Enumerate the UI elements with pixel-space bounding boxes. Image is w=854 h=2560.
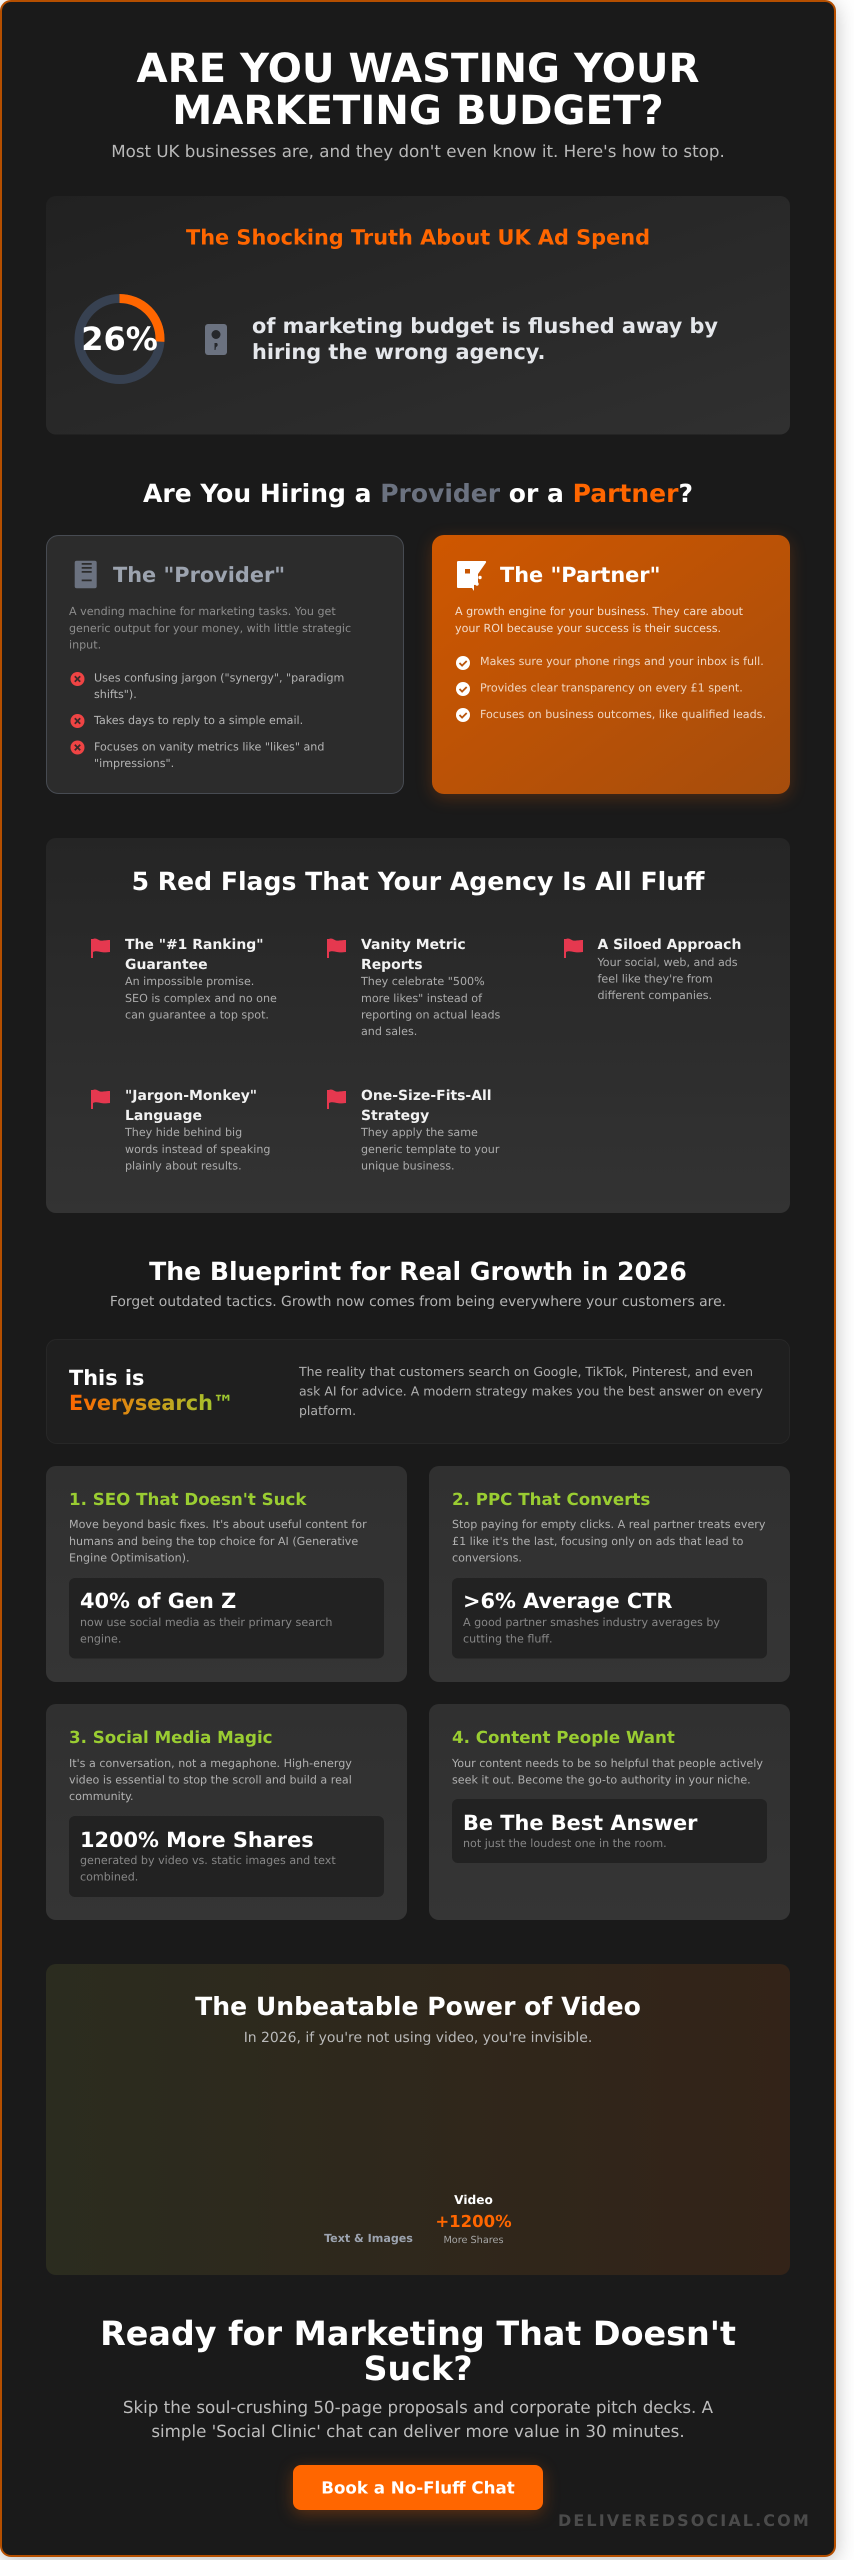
section heading: blueprint: The Blueprint for Real Growth in 2026 [149,1257,687,1286]
red flag 2: Vanity Metric [361,937,466,953]
panel subtitle: In 2026, if you're not using video, you're invisible. [244,2030,592,2046]
bar chart labels: More Shares [443,2235,504,2246]
red flag 3: different companies. [598,989,712,1002]
provider list: shifts"). [94,688,137,701]
stat box: Be The Best Answer [463,1811,698,1835]
everysearch heading: This is [69,1366,144,1390]
partner title: The "Partner" [500,563,660,587]
icon: check [456,682,470,696]
everysearch description: platform. [299,1403,356,1418]
CTA button: Book a No-Fluff Chat [321,2478,515,2498]
section heading: blueprint [110,1257,726,1310]
stat box: A good partner smashes industry averages by [463,1616,720,1629]
stat box [69,1816,384,1897]
red flag 1: SEO is complex and no one [125,992,277,1005]
stat box: generated by video vs. static images and text [80,1854,336,1867]
card: PPC: £1 like it's the last, focusing only on ads that lead to [452,1535,744,1548]
red flag 3 [564,937,741,1002]
red flag 5: Strategy [361,1108,429,1124]
stat box: engine. [80,1632,121,1646]
card: social media: community. [69,1790,134,1803]
stat box: 40% of Gen Z [80,1589,236,1613]
card: SEO: Engine Optimisation). [69,1552,190,1564]
card: content [429,1704,790,1920]
panel: red flags [46,838,790,1213]
red flag 5: generic template to your [361,1143,500,1156]
CTA heading: Ready for Marketing That Doesn't [100,2314,736,2353]
red flag 1: can guarantee a top spot. [125,1008,269,1022]
red flag 5: One-Size-Fits-All [361,1088,492,1104]
card: PPC: 2. PPC That Converts [452,1490,650,1509]
partner description: your ROI because your success is their success. [455,622,721,635]
stat box [452,1578,767,1658]
provider title: The "Provider" [113,563,285,587]
red flag 5: They apply the same [361,1126,478,1139]
card: SEO: Move beyond basic fixes. It's about useful content for [69,1518,367,1531]
stat box: combined. [80,1870,138,1884]
red flag 3: A Siloed Approach [598,937,741,953]
partner list: Provides clear transparency on every £1 spent. [480,682,743,694]
header [111,46,725,161]
red flag 5 [327,1088,500,1172]
stat box: 1200% More Shares [80,1828,314,1852]
bar chart labels: Text & Images [324,2232,413,2245]
panel: provider [46,536,404,794]
provider list: Uses confusing jargon ("synergy", "paradigm [94,672,344,684]
card: content: Your content needs to be so helpful that people actively [452,1757,763,1770]
red flag 1: Guarantee [125,957,208,973]
CTA text: Skip the soul-crushing 50-page proposals and corporate pitch decks. A [123,2398,713,2417]
stat box: >6% Average CTR [463,1589,672,1613]
card: social media: video is essential to stop the scroll and build a real [69,1774,352,1786]
CTA button [293,2465,543,2510]
panel heading: The Shocking Truth About UK Ad Spend [186,226,650,250]
provider list: "impressions". [94,757,174,770]
card: content: seek it out. Become the go-to authority in your niche. [452,1774,751,1786]
card: SEO [46,1466,407,1682]
card: PPC: Stop paying for empty clicks. A real partner treats every [452,1518,765,1531]
statistic text: of marketing budget is flushed away by [252,314,718,338]
stat box [69,1578,384,1658]
icon: cross [70,740,84,754]
card: SEO: humans and being the top choice for AI (Generative [69,1535,358,1548]
red flag 2: Reports [361,957,423,973]
everysearch heading: Everysearch™ [69,1391,234,1415]
stat box: cutting the fluff. [463,1632,553,1646]
panel: everysearch [46,1340,790,1444]
card: PPC: conversions. [452,1552,522,1564]
panel: power of video [46,1964,790,2275]
CTA text: simple 'Social Clinic' chat can deliver more value in 30 minutes. [151,2422,685,2441]
panel heading: The Unbeatable Power of Video [195,1992,641,2021]
icon: partner rocket [457,561,486,591]
red flag 5: unique business. [361,1160,455,1172]
call to action [100,2314,736,2510]
red flag 4 [91,1088,270,1172]
donut chart: 26% [79,298,160,380]
red flag 3: feel like they're from [598,972,713,986]
provider description: A vending machine for marketing tasks. You get [69,605,336,618]
title: MARKETING BUDGET? [172,88,664,134]
red flag 1: An impossible promise. [125,975,254,988]
bar chart labels [324,2193,512,2246]
icon: check [456,708,470,722]
card: social media: 3. Social Media Magic [69,1728,273,1747]
red flag 2: reporting on actual leads [361,1008,501,1022]
red flag 2 [327,937,501,1038]
panel: shocking truth [46,196,790,434]
stat box: not just the loudest one in the room. [463,1837,667,1850]
icon: provider document [75,561,97,588]
icon: cross [70,714,84,728]
card: content: 4. Content People Want [452,1728,675,1747]
section heading: provider or partner: Are You Hiring a Provider or a Partner? [143,479,693,508]
red flag 4: plainly about results. [125,1160,242,1172]
red flag 4: They hide behind big [125,1126,242,1139]
card: social media [46,1704,407,1920]
provider description: generic output for your money, with little strategic [69,622,351,635]
provider list: Takes days to reply to a simple email. [93,714,303,727]
partner list: Focuses on business outcomes, like qualified leads. [480,708,766,721]
stat box [452,1799,767,1863]
card: SEO: 1. SEO That Doesn't Suck [69,1490,307,1509]
bar chart labels: +1200% [435,2212,512,2231]
title: ARE YOU WASTING YOUR [137,46,699,92]
partner list: Makes sure your phone rings and your inbox is full. [480,655,764,668]
icon: check [456,656,470,670]
red flag 4: "Jargon-Monkey" [125,1088,257,1104]
CTA heading: Suck? [363,2349,473,2388]
red flag 1 [91,937,277,1022]
footer brand: DELIVEREDSOCIAL.COM [558,2511,811,2530]
section subtitle: Forget outdated tactics. Growth now comes from being everywhere your customers are. [110,1294,726,1310]
panel heading: 5 Red Flags That Your Agency Is All Fluff [132,867,705,896]
everysearch description: The reality that customers search on Google, TikTok, Pinterest, and even [299,1364,753,1379]
card: PPC [429,1466,790,1682]
red flag 1: The "#1 Ranking" [125,937,264,953]
provider list: Focuses on vanity metrics like "likes" and [94,740,324,754]
red flag 3: Your social, web, and ads [598,956,738,969]
partner list [456,655,766,722]
everysearch description: ask AI for advice. A modern strategy makes you the best answer on every [299,1384,763,1398]
partner description: A growth engine for your business. They care about [455,605,743,618]
donut chart: 26%: 26% [81,320,158,358]
provider list [70,672,344,770]
subtitle: Most UK businesses are, and they don't even know it. Here's how to stop. [111,142,725,161]
stat box: now use social media as their primary search [80,1616,332,1629]
bar chart labels: Video [454,2193,493,2207]
provider description: input. [69,638,101,652]
statistic text: hiring the wrong agency. [252,340,545,364]
red flag 4: Language [125,1108,202,1124]
red flag 4: words instead of speaking [125,1143,270,1156]
card: social media: It's a conversation, not a megaphone. High-energy [69,1757,352,1770]
panel: partner [432,535,790,794]
red flag 2: They celebrate "500% [361,975,485,988]
red flag 2: and sales. [361,1025,417,1038]
icon: toilet [205,324,227,355]
red flag 2: more likes" instead of [361,992,483,1005]
icon: cross [70,672,84,686]
